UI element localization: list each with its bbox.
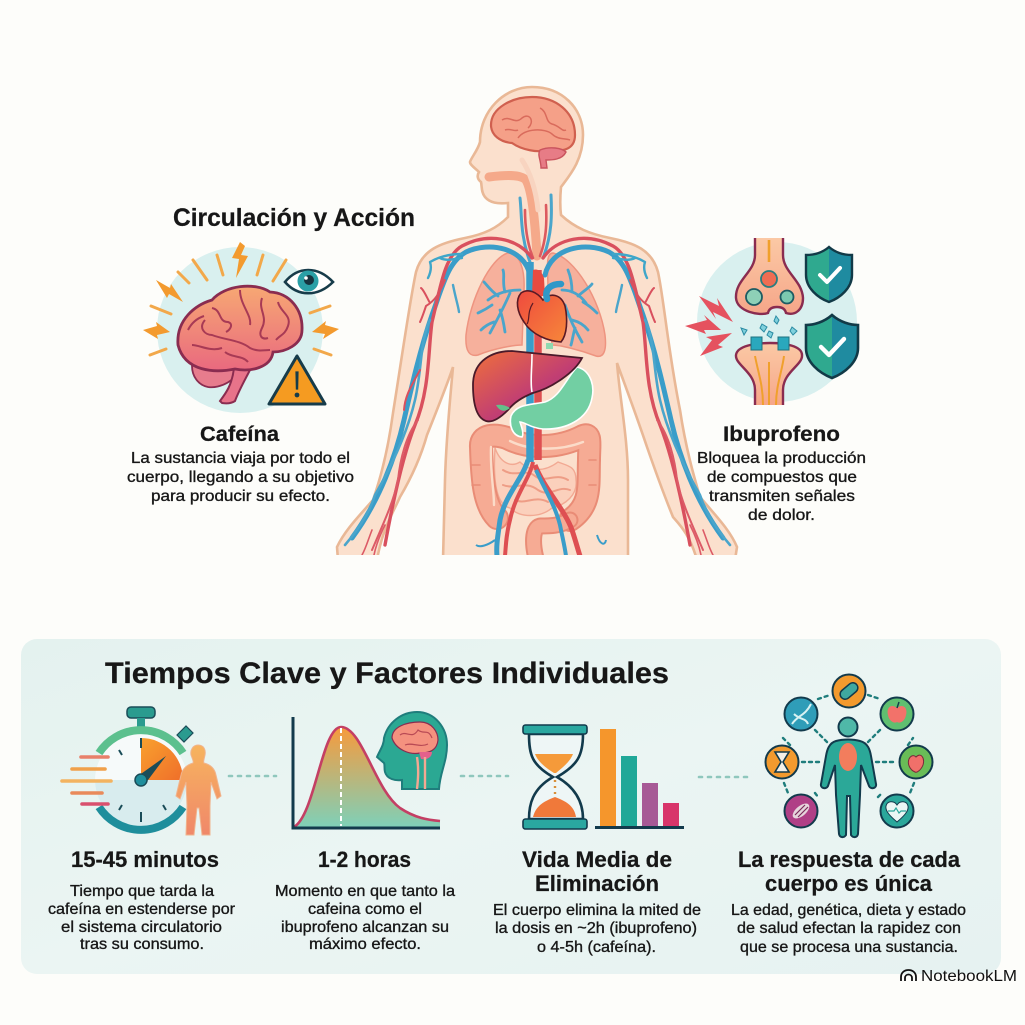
logo: NotebookLM: NotebookLM	[921, 968, 1017, 985]
stat: 15-45 minutos: el sistema circulatorio	[61, 919, 222, 936]
stat: vida media: El cuerpo elimina la mited de	[493, 902, 701, 919]
icon: stopwatch	[62, 707, 221, 835]
text: ibuprofeno description: Bloquea la producción	[697, 450, 866, 467]
circle: dna	[784, 698, 818, 730]
text: cafeína description: para producir su efecto.	[151, 488, 330, 505]
connector dots	[699, 776, 747, 778]
circle: heart	[880, 794, 914, 828]
title: Circulación y Acción: Circulación y Acción	[173, 204, 415, 232]
text: cafeína description	[127, 450, 354, 505]
esophagus	[489, 160, 538, 256]
stat: vida media: o 4-5h (cafeína).	[537, 939, 656, 956]
stat: 15-45 minutos: tras su consumo.	[80, 936, 204, 953]
shield lower	[806, 315, 858, 378]
text: cafeína description: cuerpo, llegando a su objetivo	[127, 469, 354, 486]
circle: pill	[832, 674, 866, 708]
text: ibuprofeno description	[697, 450, 866, 524]
shield upper	[806, 247, 852, 302]
central blood vessels	[476, 262, 606, 556]
chart: concentration curve	[293, 717, 440, 828]
heart	[517, 269, 567, 342]
connector dots	[229, 775, 276, 777]
chart: elimination bars	[595, 729, 684, 829]
body silhouette	[337, 87, 737, 560]
stat: 15-45 minutos: 15-45 minutos	[71, 847, 219, 872]
small green marker	[546, 343, 553, 349]
stat: 1-2 horas: máximo efecto.	[309, 936, 421, 953]
person	[176, 745, 221, 835]
circle: organ	[900, 746, 932, 778]
stat: 1-2 horas: ibuprofeno alcanzan su	[281, 919, 449, 936]
arm and torso vessels: right	[543, 238, 730, 555]
panel: tiempos clave	[21, 639, 1001, 974]
eye	[285, 270, 333, 293]
lungs	[466, 253, 606, 356]
label: Ibuprofeno: Ibuprofeno	[723, 423, 840, 446]
rays	[150, 255, 331, 355]
stat: respuesta única: cuerpo es única	[765, 871, 933, 896]
large and small intestine	[472, 435, 596, 562]
icon: caffeine brain	[143, 242, 339, 413]
stat: respuesta única	[731, 847, 966, 956]
stat: vida media: Eliminación	[535, 871, 659, 896]
stat: vida media: Vida Media de	[522, 847, 672, 872]
arm and torso vessels: left	[345, 238, 532, 555]
text: ibuprofeno description: transmiten señales	[709, 488, 855, 505]
stat: vida media: la dosis en ~2h (ibuprofeno)	[495, 920, 697, 937]
panel heading: Tiempos Clave y Factores Individuales	[105, 657, 669, 690]
circle: muscle	[784, 794, 818, 828]
label: Cafeína: Cafeína	[200, 423, 279, 446]
text: ibuprofeno description: de compuestos que	[707, 469, 857, 486]
bolts	[143, 242, 339, 339]
upper neuron	[736, 238, 803, 314]
diagram: individual factors	[766, 674, 932, 837]
warning triangle	[269, 356, 325, 404]
central figure	[821, 718, 876, 837]
stat: 1-2 horas	[275, 847, 455, 953]
lower neuron	[736, 337, 802, 405]
liver	[473, 351, 582, 421]
brain	[178, 286, 302, 403]
circle: apple	[880, 698, 914, 730]
stat: 15-45 minutos	[48, 847, 236, 953]
stat: 15-45 minutos: cafeína en estenderse por	[48, 901, 236, 918]
circle: hourglass dna	[766, 746, 798, 778]
stat: 1-2 horas: Momento en que tanto la	[275, 883, 455, 900]
label: Ibuprofeno	[697, 423, 866, 524]
stat: 1-2 horas: cafeina como el	[308, 901, 422, 918]
icon: hourglass	[523, 725, 587, 829]
released molecules	[741, 316, 797, 338]
icon: ibuprofen synapse	[685, 238, 858, 405]
connector dots	[461, 775, 508, 777]
stomach	[510, 367, 593, 437]
stat: 15-45 minutos: Tiempo que tarda la	[70, 883, 214, 900]
dotted links	[783, 695, 914, 797]
pain bolts	[685, 296, 733, 356]
brain in head	[491, 97, 575, 168]
icon: head with brain	[377, 712, 447, 789]
stat: respuesta única: que se procesa una sustancia.	[740, 939, 958, 956]
text: ibuprofeno description: de dolor.	[748, 507, 815, 524]
stat: 1-2 horas: 1-2 horas	[318, 847, 411, 872]
stat: respuesta única: de salud efectan la rapidez con	[737, 920, 961, 937]
stat: respuesta única: La edad, genética, dieta y estado	[731, 902, 966, 919]
label: Cafeína	[127, 423, 354, 505]
stat: respuesta única: La respuesta de cada	[738, 847, 961, 872]
illustration: human body with organs	[337, 87, 737, 562]
text: cafeína description: La sustancia viaja por todo el	[131, 450, 350, 467]
neck vessels	[520, 195, 551, 262]
stat: vida media	[493, 847, 701, 956]
